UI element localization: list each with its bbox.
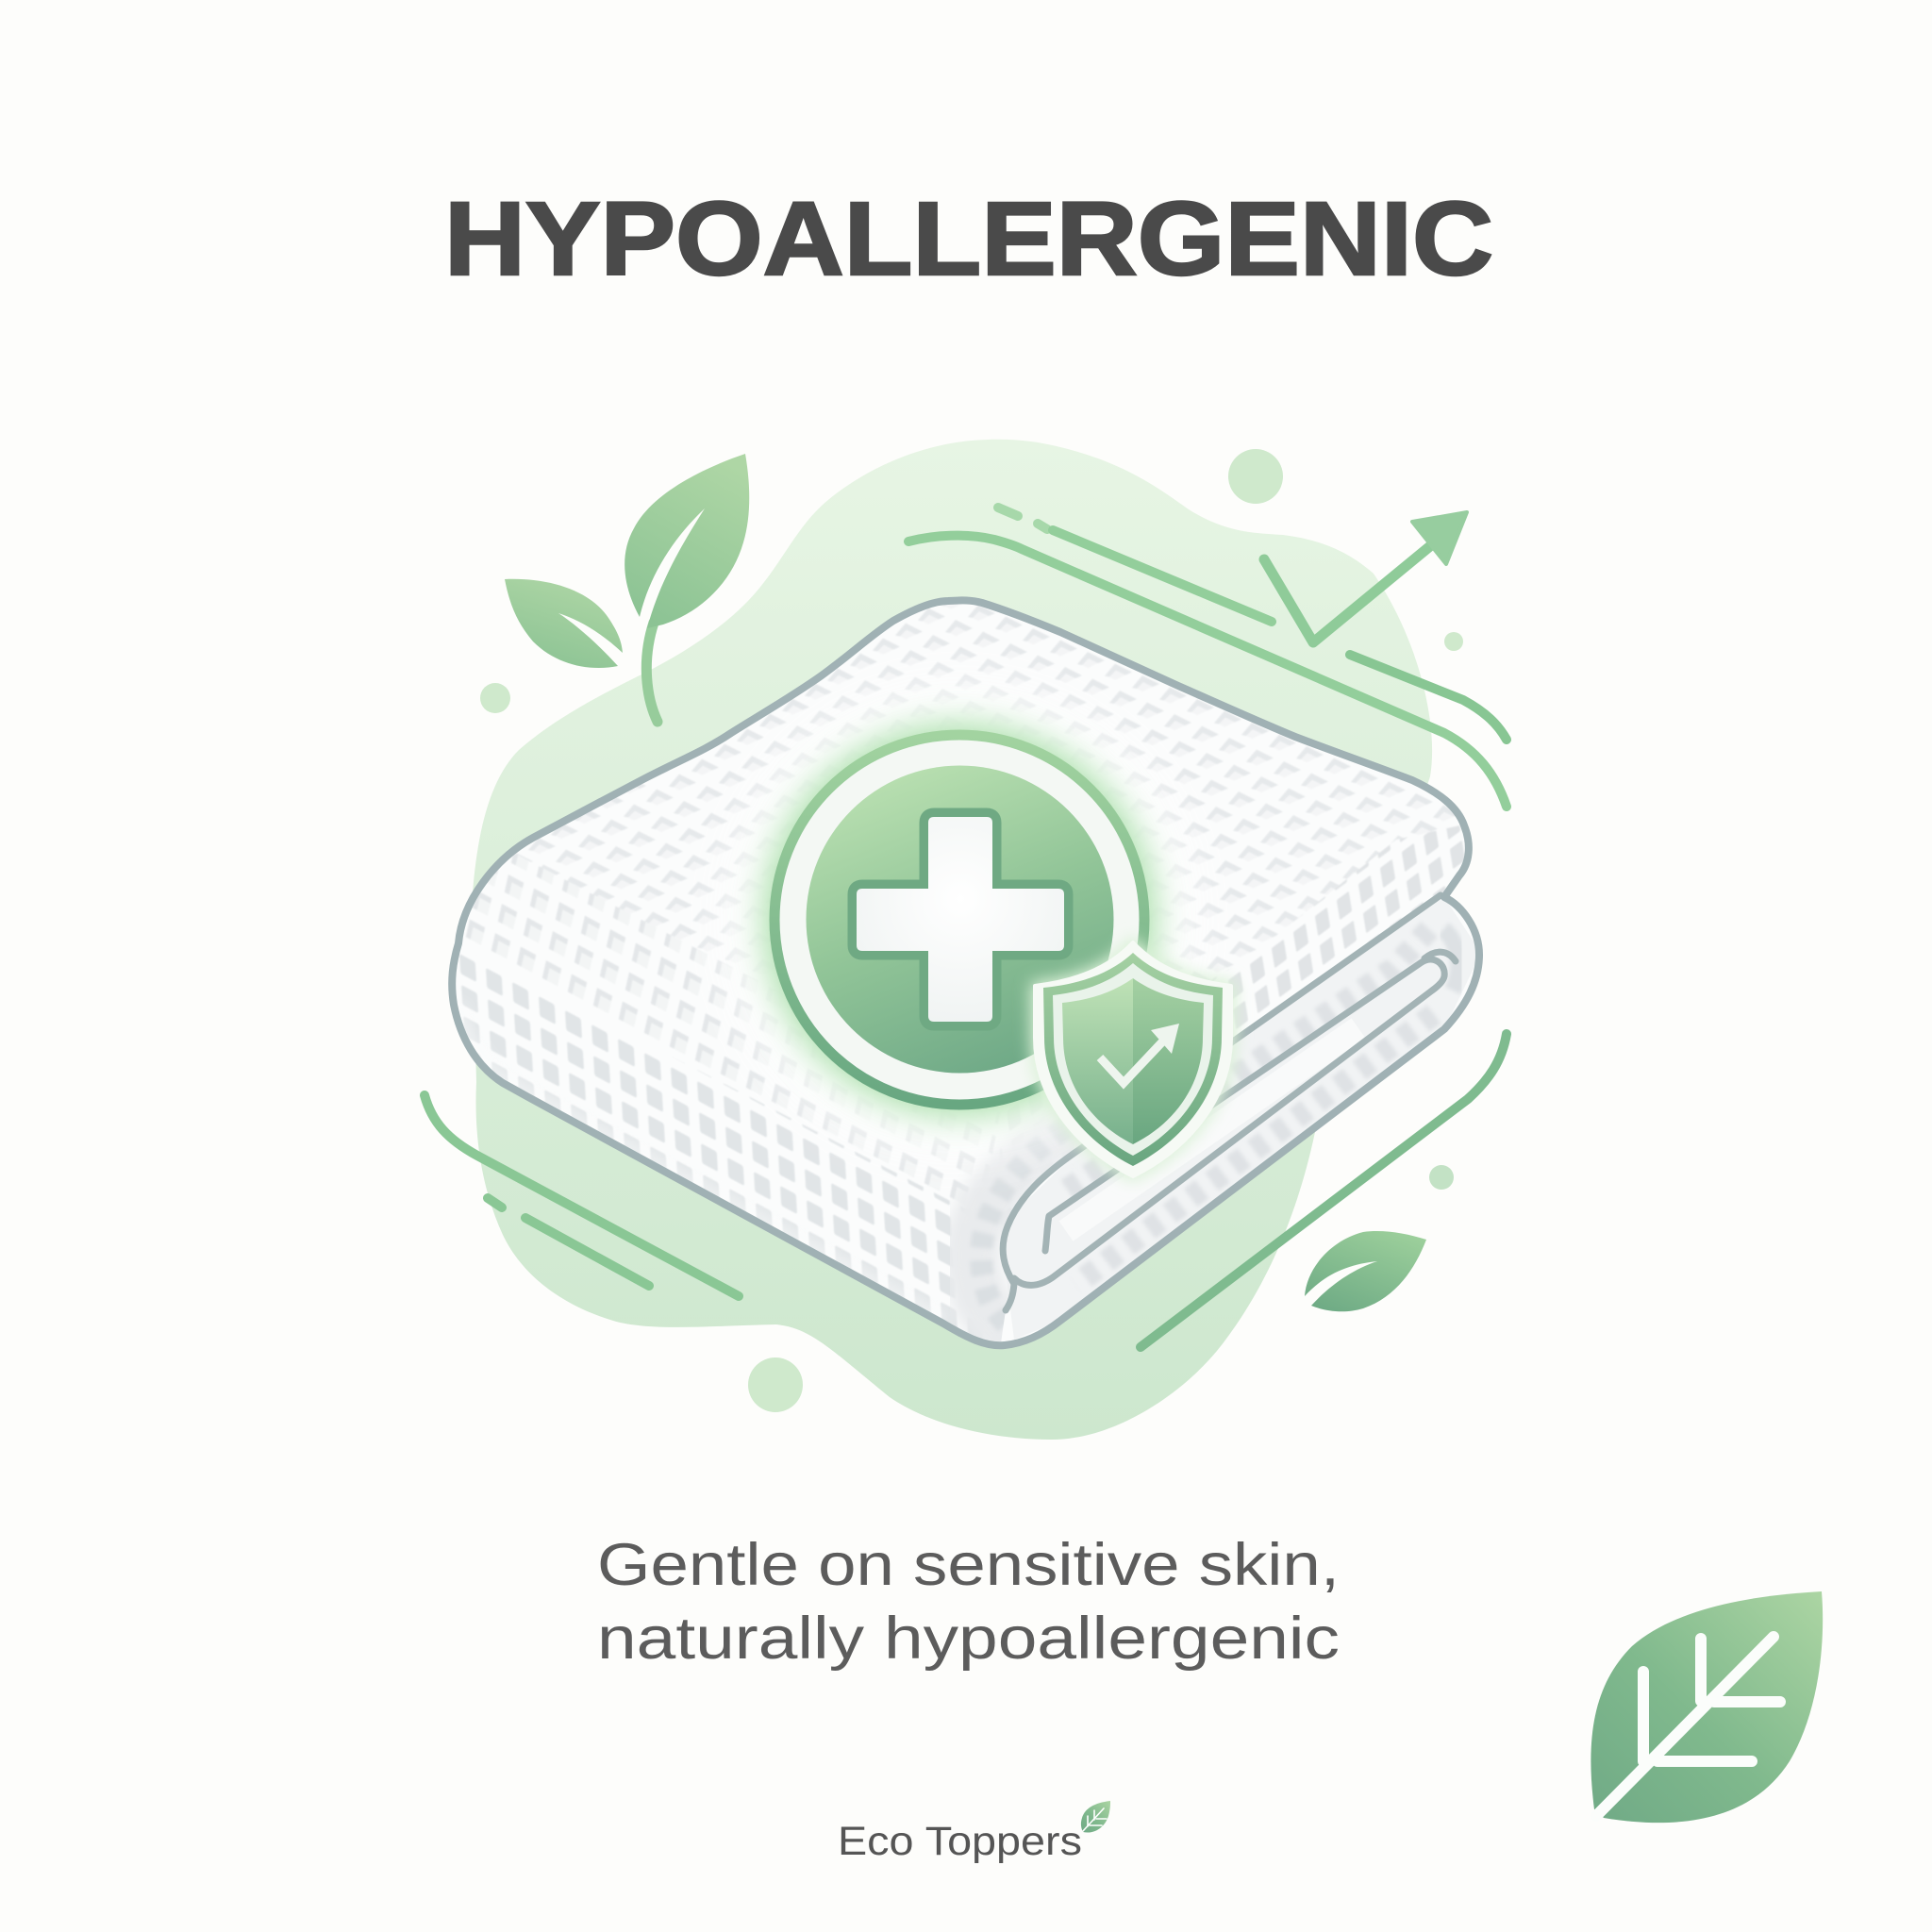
motion lines top right	[908, 508, 1507, 807]
icon: brand small leaf	[1081, 1801, 1110, 1833]
background green blob	[472, 440, 1432, 1440]
towel fold lines	[1003, 895, 1456, 1310]
towel body	[452, 600, 1479, 1345]
title: HYPOALLERGENIC	[444, 181, 1493, 297]
sprout with two leaves	[505, 454, 749, 722]
upper surface weave	[459, 605, 1464, 1341]
illustration: towel with badge and leaves	[425, 440, 1507, 1440]
small leaf bottom right	[1305, 1231, 1426, 1311]
subtitle: naturally hypoallergenic	[597, 1606, 1340, 1672]
folded waffle towel	[434, 566, 1491, 1368]
subtitle: Gentle on sensitive skin,	[597, 1532, 1340, 1598]
motion line bottom right	[1141, 1034, 1507, 1347]
icon: large leaf logo	[1591, 1591, 1823, 1823]
decorative dots	[480, 449, 1463, 1412]
lower fold shading and weave	[1000, 897, 1481, 1340]
shield icon	[1035, 942, 1231, 1176]
cross	[857, 817, 1064, 1022]
motion lines bottom left	[425, 1095, 739, 1296]
towel outline	[452, 600, 1479, 1345]
glow behind badge	[733, 693, 1186, 1146]
check and arrow	[1100, 1024, 1179, 1083]
brand name: Eco Toppers	[838, 1819, 1082, 1864]
medical cross badge	[774, 735, 1144, 1105]
growth arrow with check	[1264, 512, 1467, 642]
